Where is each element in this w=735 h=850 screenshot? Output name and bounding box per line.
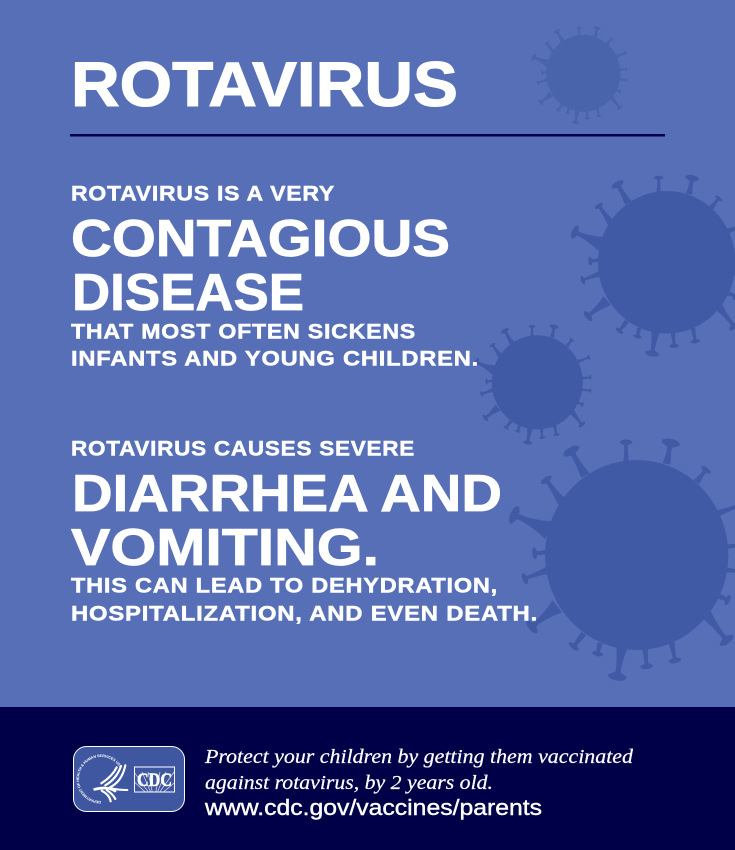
- text block: contagious disease: ROTAVIRUS IS A VERY: [71, 183, 335, 206]
- icon: large virus right: [569, 174, 735, 358]
- icon: HHS seal: DEPARTMENT OF HEALTH & HUMAN SERVICES USA: [76, 754, 120, 804]
- title: ROTAVIRUS: [71, 50, 458, 120]
- footer band: [0, 707, 735, 850]
- logo badge: HHS and CDC: [73, 746, 185, 812]
- text block: diarrhea and vomiting: VOMITING.: [71, 519, 379, 577]
- icon: largest virus bottom: [507, 437, 735, 682]
- text block: diarrhea and vomiting: [71, 438, 538, 626]
- text block: contagious disease: CONTAGIOUS: [71, 210, 450, 268]
- text block: diarrhea and vomiting: ROTAVIRUS CAUSES SEVERE: [71, 438, 415, 461]
- text block: contagious disease: [71, 183, 479, 371]
- text block: contagious disease: DISEASE: [72, 264, 304, 322]
- text block: diarrhea and vomiting: DIARRHEA AND: [72, 465, 502, 523]
- footer message: [204, 747, 633, 820]
- footer message: against rotavirus, by 2 years old.: [205, 773, 493, 794]
- text block: diarrhea and vomiting: THIS CAN LEAD TO DEHYDRATION,: [71, 574, 498, 597]
- icon: CDC logo: CDC: [137, 770, 172, 791]
- footer url: www.cdc.gov/vaccines/parents: [204, 795, 542, 820]
- text block: contagious disease: THAT MOST OFTEN SICKENS: [71, 320, 416, 343]
- title divider: [70, 134, 665, 136]
- icon: small virus top: [531, 26, 627, 125]
- text block: diarrhea and vomiting: HOSPITALIZATION, AND EVEN DEATH.: [71, 603, 538, 626]
- icon: medium virus center: [473, 324, 591, 445]
- text block: contagious disease: INFANTS AND YOUNG CHILDREN.: [71, 348, 479, 371]
- footer message: Protect your children by getting them vaccinated: [204, 747, 633, 768]
